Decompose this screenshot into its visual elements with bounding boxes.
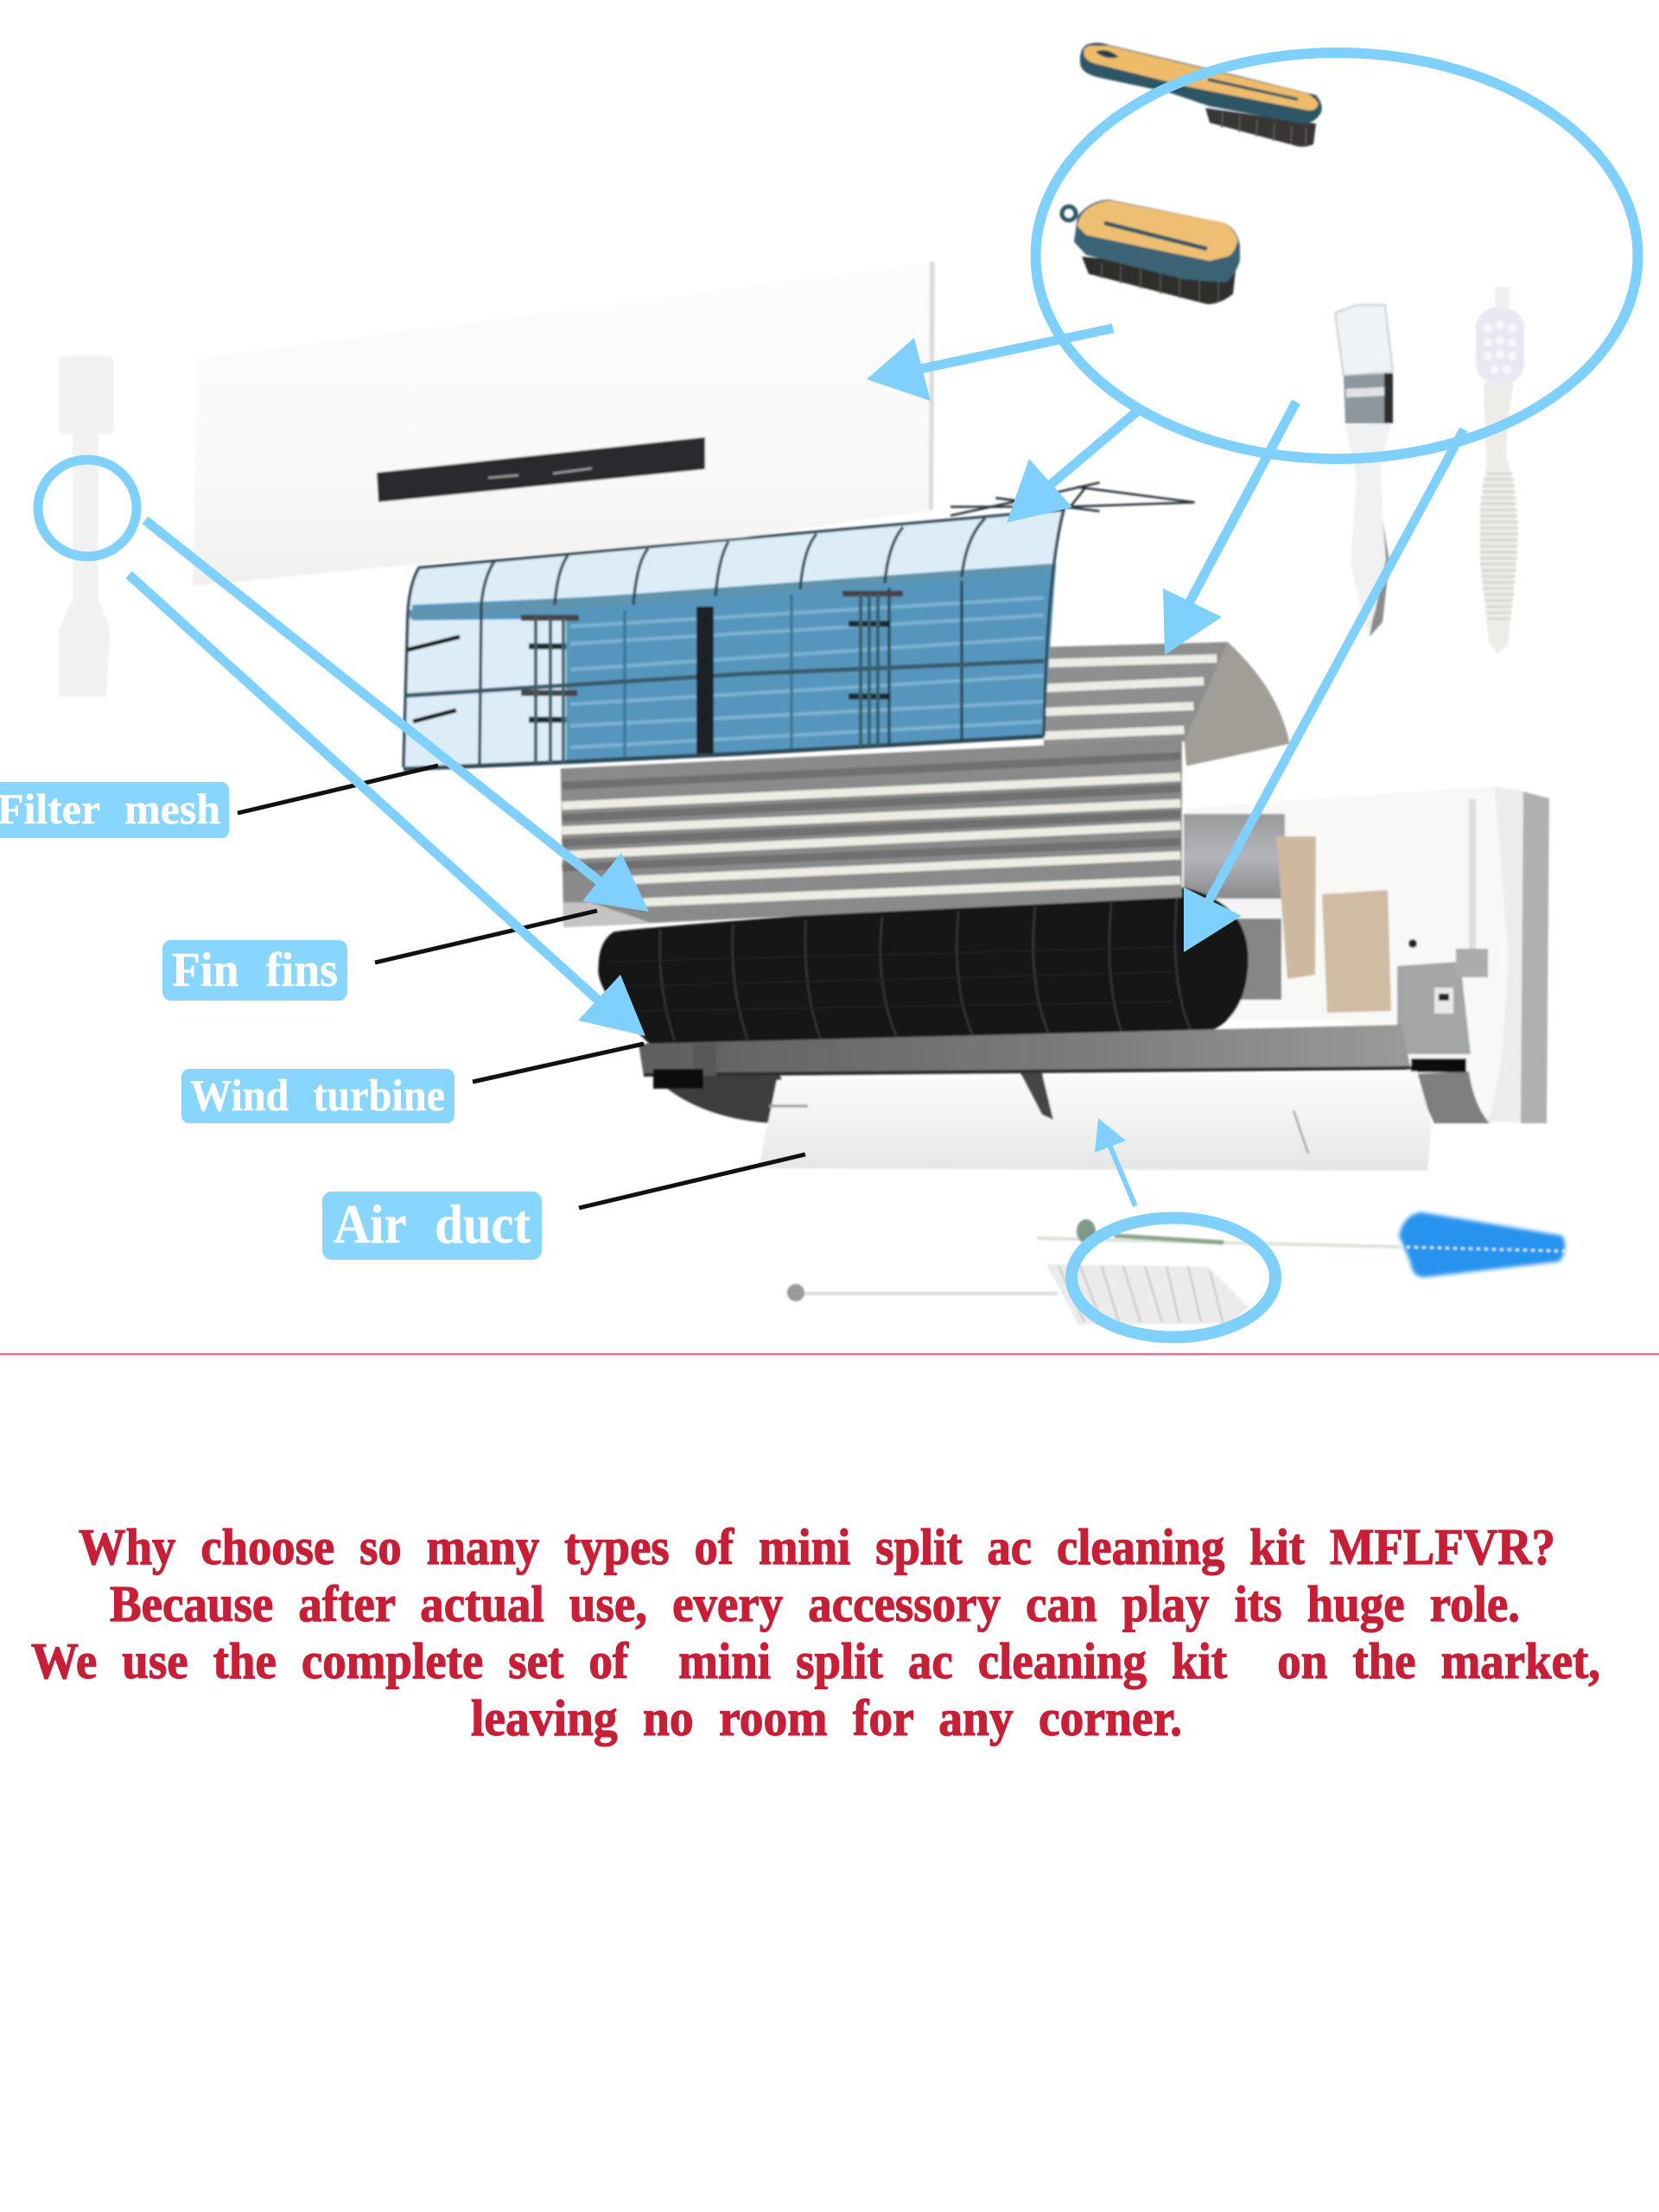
arrow: to front panel (867, 328, 1113, 401)
filter mesh (404, 510, 1064, 769)
divider line (0, 1353, 1659, 1355)
flat paint brush (1335, 305, 1393, 637)
arrow: bottle brush to duct (1095, 1118, 1135, 1206)
leader: air duct (579, 1154, 805, 1208)
label: Air duct: Air duct (334, 1193, 531, 1255)
slim white brush (59, 356, 113, 696)
white bottle brush (787, 1264, 1249, 1325)
front panel (193, 262, 935, 586)
leader: filter mesh (238, 766, 438, 813)
ring: large tool group (1035, 53, 1638, 459)
ring: slim brush (38, 460, 137, 556)
blue callout rings and arrows (38, 53, 1638, 1338)
leader: wind turbine (473, 1044, 644, 1082)
arrow: slim brush to fan (129, 575, 645, 1036)
label: Fin fins: Fin fins (172, 944, 338, 997)
label: Wind turbine: Wind turbine (190, 1071, 445, 1121)
front fin section (561, 739, 1182, 927)
air conditioner exploded diagram (193, 262, 1549, 1171)
filter mesh top edge (950, 482, 1194, 516)
blower fan (598, 887, 1249, 1044)
support bar and outlet (639, 1025, 1466, 1123)
yellow long-handled brush (1080, 43, 1322, 147)
tools (59, 43, 1567, 1325)
explanation text: Because after actual use, every accessory can play its huge role. (110, 1575, 1520, 1632)
leader: fin fins (375, 911, 597, 963)
explanation text (31, 1518, 1600, 1746)
yellow short brush (1062, 200, 1240, 304)
arrow: to rear fin (1163, 402, 1296, 655)
black leader lines (238, 766, 805, 1208)
ring: white bottle brush (1071, 1218, 1275, 1338)
rear fin section (1044, 642, 1290, 766)
arrow: to filter mesh (1007, 411, 1137, 523)
blue bottle brush (1037, 1212, 1567, 1277)
unit body (1184, 786, 1549, 1123)
air duct (759, 1071, 1432, 1171)
arrow: slim brush to fins (145, 520, 649, 912)
label: Filter mesh: Filter mesh (0, 785, 220, 833)
explanation text: Why choose so many types of mini split ac cleaning kit MFLFVR? (79, 1518, 1555, 1575)
explanation text: leaving no room for any corner. (471, 1689, 1182, 1746)
white scrub brush (1476, 287, 1524, 654)
arrow: to blower fan (1184, 429, 1464, 952)
